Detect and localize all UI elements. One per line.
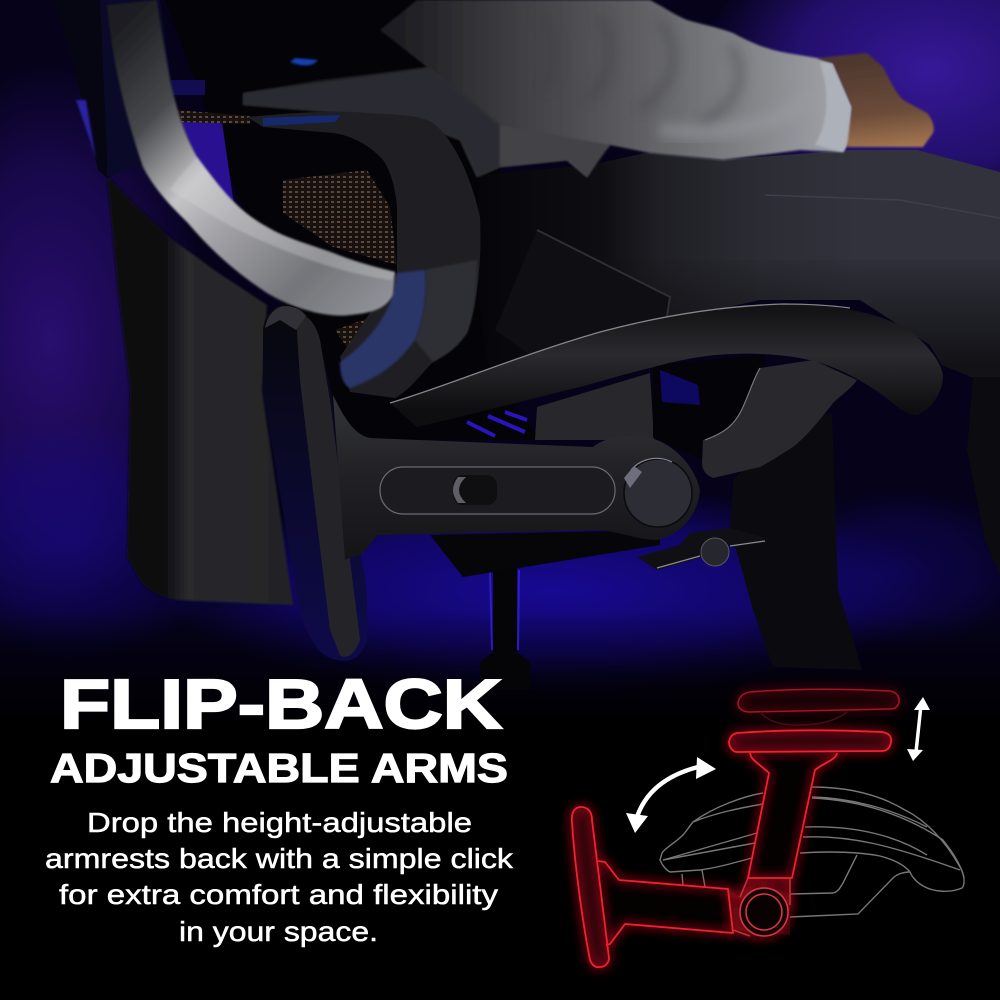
trousers [477,150,1000,377]
shirt [243,0,852,177]
flipped pad [572,807,609,967]
purple slit [178,115,234,205]
heading: flip-back: FLIP-BACK [60,665,502,743]
mesh back [283,170,397,265]
seat edge [390,304,943,427]
chair [55,0,943,690]
rear shell [107,175,293,605]
silver back frame [107,0,395,316]
description text [45,807,514,947]
gas lift [480,565,530,690]
flipped tube [598,861,733,945]
dark fills [572,689,899,967]
hinge joint [624,459,692,527]
black rear block [653,355,765,460]
seat bracket [702,360,857,478]
hand [817,53,934,147]
upper pad [738,689,899,712]
pad lit face [296,315,360,657]
trouser shading [600,260,1000,377]
tilt lever [637,528,767,570]
arrow: height adjustment [907,697,930,761]
description text: armrests back with a simple click [45,843,514,874]
description text: for extra comfort and flexibility [59,879,498,910]
icon: armrest positions (red neon) [572,689,899,967]
dark rear seating area [165,0,540,440]
flipped armrest [263,305,700,661]
shirt lower shadow [243,68,500,177]
blue stripes under seat [467,412,527,436]
pocket [495,230,670,355]
seat base [430,530,660,577]
description text: Drop the height-adjustable [87,807,472,838]
side arm lit face [415,260,477,362]
arm pad [263,305,367,661]
upright post [748,753,837,878]
subheading: adjustable arms: ADJUSTABLE ARMS [50,745,508,791]
description text: in your space. [179,916,378,947]
side arm blue band [340,270,426,388]
black curved side arm [247,112,480,398]
icon: chair seat outline [660,787,964,925]
sleeve folds [540,10,740,125]
trouser seam [765,195,1000,218]
far leg [730,413,862,670]
slot [380,467,615,514]
arm tube [333,395,700,560]
hinge [733,878,790,936]
person: seated figure [165,0,1000,670]
neon glow [572,689,899,967]
lower pad [729,730,891,752]
slider button [453,475,497,505]
central seat block [535,373,654,440]
arrow: swing direction [626,757,716,833]
left frame strip [55,0,108,178]
